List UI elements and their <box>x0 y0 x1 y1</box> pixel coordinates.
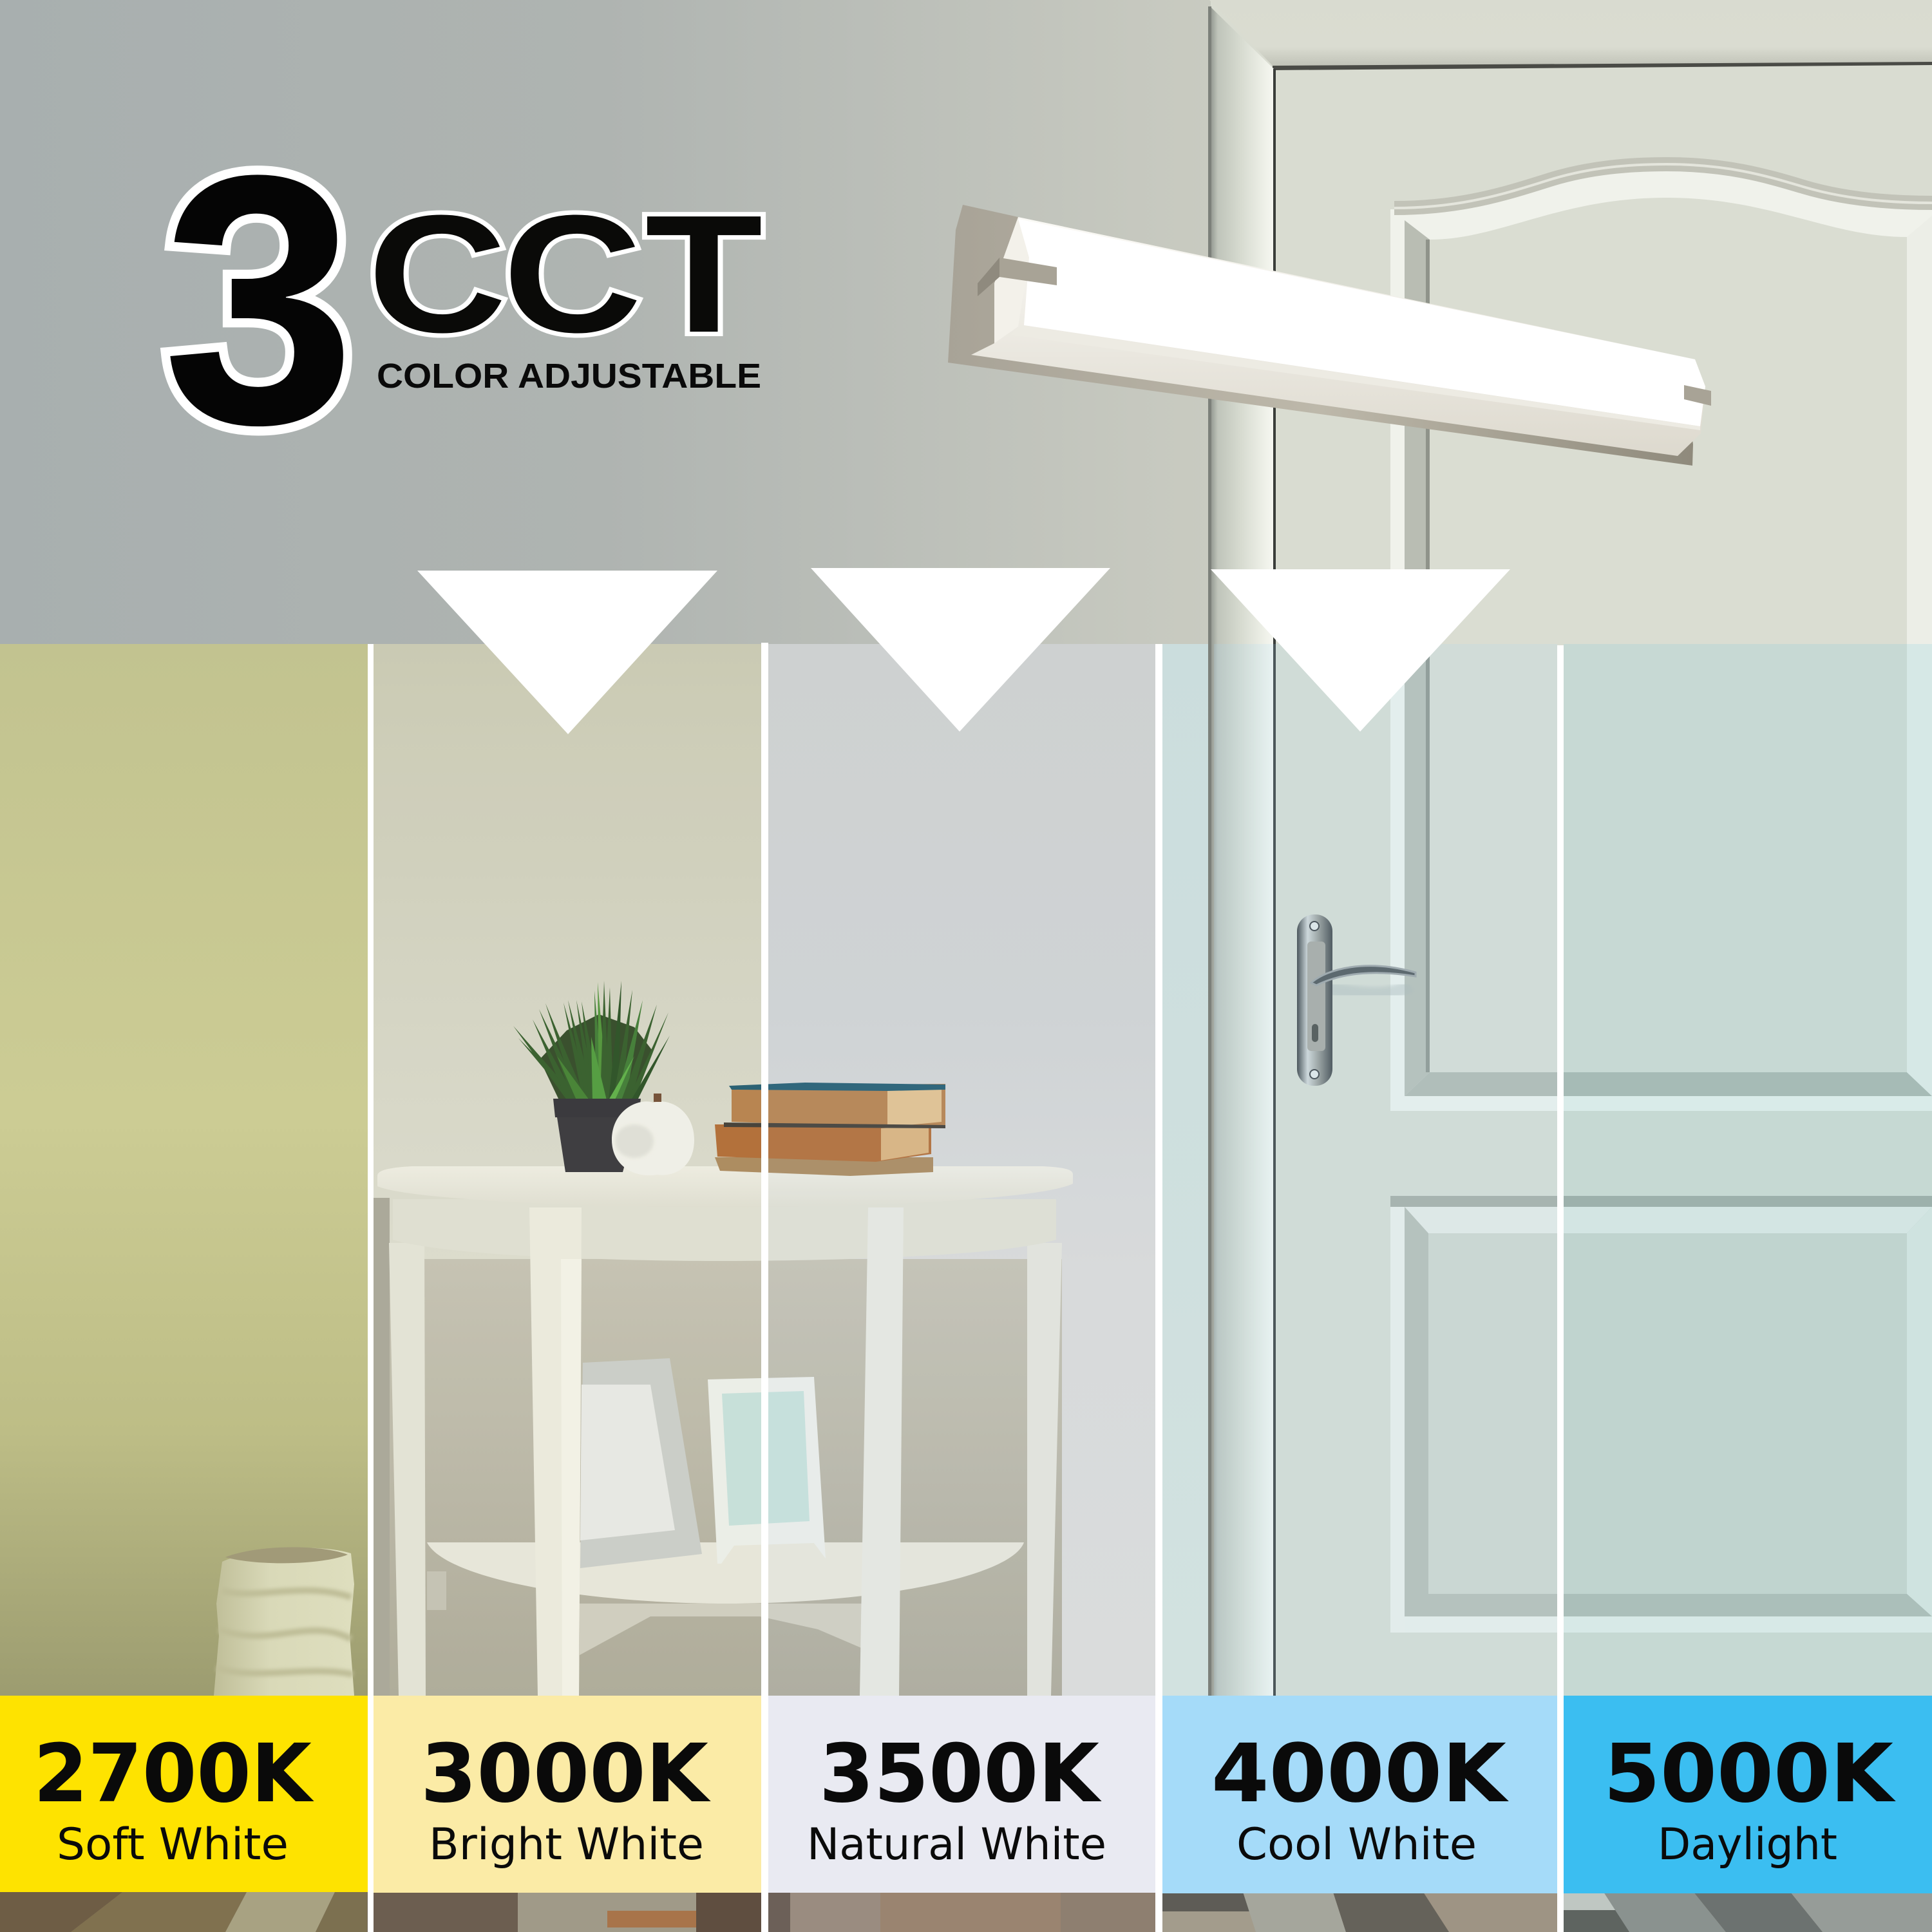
lower panel groove <box>1390 1196 1932 1207</box>
plank 5000K dark <box>1564 1910 1629 1932</box>
big numeral 3: 3 <box>162 101 355 498</box>
plant pot <box>557 1117 638 1172</box>
lower right bevel <box>1907 1207 1932 1616</box>
icon: door handle <box>1297 914 1416 1086</box>
leg: front left <box>529 1208 582 1696</box>
name: Natural White <box>807 1819 1106 1870</box>
name: Bright White <box>429 1819 704 1870</box>
panel: tinted wall columns <box>0 644 1214 1696</box>
vase folds <box>216 1591 353 1674</box>
upper panel raised face <box>1430 198 1907 1072</box>
handle plate <box>1297 914 1332 1086</box>
lower shelf <box>427 1542 1024 1604</box>
bar <box>1564 1696 1932 1893</box>
apron <box>393 1199 1056 1261</box>
CCT word: CCT <box>368 180 762 368</box>
door base <box>1211 0 1932 1696</box>
side frame <box>1210 6 1274 1696</box>
frame: silver picture frame <box>580 1358 702 1568</box>
wall tint 2700K <box>0 644 368 1696</box>
value: 4000K <box>1211 1727 1509 1821</box>
left bevel dark edge <box>1426 240 1430 1072</box>
panel: floor planks <box>0 1889 1932 1932</box>
middle book <box>715 1124 931 1162</box>
lever shadow <box>1327 985 1410 994</box>
diffuser left side <box>994 217 1029 343</box>
arch highlight line <box>1394 164 1932 208</box>
frame edge line <box>1208 6 1211 1696</box>
plank 4000K left light <box>1162 1911 1259 1932</box>
icon: potted plant <box>513 981 670 1172</box>
plank 2700K right <box>316 1892 367 1932</box>
apple stem <box>654 1094 661 1102</box>
bar <box>374 1696 761 1893</box>
tint overlay: 3500K cool <box>768 644 1155 1696</box>
right bracket <box>1684 385 1711 406</box>
shelf rim shadow <box>427 1571 446 1610</box>
stand frame glass <box>722 1391 810 1526</box>
plank 3500K mid <box>790 1892 880 1932</box>
2700K label <box>0 1696 368 1892</box>
value: 3000K <box>421 1727 711 1821</box>
wall tint 4000K <box>1162 644 1214 1696</box>
wall tint 3000K <box>374 644 761 1696</box>
5000K label <box>1564 1696 1932 1893</box>
top frame <box>1209 0 1932 67</box>
arch moulding <box>1394 164 1932 208</box>
left bevel upper <box>1405 220 1430 1096</box>
mid rail <box>1390 1111 1932 1196</box>
top screw <box>1310 922 1319 931</box>
4000K label <box>1162 1696 1557 1893</box>
back shelf strut <box>580 1604 863 1655</box>
bar <box>0 1696 368 1892</box>
stand frame outer <box>708 1377 826 1564</box>
plank 4000K warm <box>1423 1892 1557 1932</box>
plant blades <box>513 981 670 1100</box>
plank 4000K mid <box>1243 1892 1346 1932</box>
name: Cool White <box>1236 1819 1477 1870</box>
lower panel raised face <box>1428 1233 1907 1594</box>
door hinge gap line <box>1273 69 1276 1696</box>
leg: front right <box>860 1208 904 1696</box>
plank 3000K right <box>696 1892 761 1932</box>
arrow: down triangle centre <box>811 568 1110 732</box>
upper bevel right side <box>1907 1072 1932 1096</box>
vase opening <box>225 1547 348 1563</box>
apple shade <box>615 1124 654 1158</box>
door top gap line <box>1273 62 1932 70</box>
vase body <box>214 1548 354 1696</box>
plank 5000K right <box>1790 1892 1932 1932</box>
top cover teal <box>729 1083 945 1091</box>
nickel backplate <box>948 205 1693 466</box>
plank 2700K dark <box>0 1892 122 1932</box>
plank 2700K mid <box>71 1892 247 1932</box>
top wall background <box>0 0 1211 644</box>
bottom book <box>715 1157 933 1176</box>
silver frame outer <box>580 1358 702 1568</box>
bottom screw <box>1310 1070 1319 1079</box>
3500K label <box>768 1696 1155 1893</box>
plank 3000K light <box>518 1892 696 1932</box>
upper panel white band <box>1390 166 1932 1111</box>
diffuser front bright face <box>1018 219 1705 426</box>
name: Daylight <box>1658 1819 1837 1870</box>
diffuser lip line <box>1011 325 1700 430</box>
lower panel bevel <box>1405 1207 1932 1616</box>
plank 3000K orange <box>607 1911 696 1927</box>
plank 4000K dark <box>1333 1892 1449 1932</box>
tabletop <box>377 1166 1073 1208</box>
door with frame <box>1208 0 1932 1696</box>
arrow: down triangle right <box>1211 569 1510 732</box>
lower panel moulding <box>1405 1616 1932 1633</box>
lower top bevel <box>1405 1207 1932 1233</box>
icon: stacked books <box>715 1083 945 1176</box>
plank 4000K left dark <box>1162 1892 1249 1911</box>
value: 5000K <box>1604 1727 1896 1821</box>
left wall shade <box>374 1198 390 1696</box>
value: 2700K <box>33 1727 314 1821</box>
book shadow line <box>724 1122 945 1128</box>
bar <box>1162 1696 1557 1893</box>
name: Soft White <box>57 1819 289 1870</box>
diffuser body <box>971 217 1705 456</box>
silver frame inner photo <box>580 1385 675 1540</box>
left moulding lower <box>1390 1207 1405 1633</box>
bar <box>768 1696 1155 1893</box>
plank 3500K left <box>768 1892 790 1932</box>
product: vanity light fixture <box>948 205 1711 466</box>
lever <box>1311 966 1416 985</box>
top book cover <box>732 1084 945 1127</box>
3000K label <box>374 1696 761 1893</box>
wall tint 3500K <box>768 644 1155 1696</box>
floor base <box>0 1889 1932 1932</box>
leg: far right <box>1027 1243 1062 1696</box>
panel: console table scene <box>374 1166 1073 1696</box>
plank 3500K right <box>1061 1892 1155 1932</box>
plank 3000K left <box>374 1892 518 1932</box>
panel: colour temperature label bars <box>0 1696 1932 1893</box>
plank 5000K mid 2 <box>1694 1892 1823 1932</box>
plate inset <box>1307 942 1325 1051</box>
frame: white stand frame <box>708 1377 826 1564</box>
tint overlay: 4000K blue <box>1214 644 1557 1696</box>
plank 5000K mid <box>1604 1892 1726 1932</box>
icon: ceramic vase <box>214 1547 354 1696</box>
tint overlay: 5000K blue <box>1564 644 1932 1696</box>
tint overlay: 3000K warm <box>374 644 761 1696</box>
plant dark mass <box>540 1014 652 1100</box>
plank 3500K warm <box>880 1892 1061 1932</box>
icon: white ceramic apple <box>612 1094 694 1175</box>
value: 3500K <box>819 1727 1102 1821</box>
column dividers <box>368 643 1564 1932</box>
keyhole <box>1312 1024 1318 1042</box>
middle pages <box>881 1126 929 1160</box>
plank 2700K light <box>225 1892 335 1932</box>
upper bottom bevel <box>1405 1072 1932 1096</box>
subtitle: COLOR ADJUSTABLE <box>377 357 761 395</box>
arrow: down triangle left <box>417 571 717 734</box>
top book pages <box>887 1087 942 1127</box>
pot rim <box>553 1099 641 1117</box>
apple body <box>612 1101 694 1175</box>
leg: far left <box>389 1243 426 1696</box>
shadow wall under table <box>389 1259 1062 1696</box>
leg front left shade <box>561 1259 582 1696</box>
title: 3CCT logo <box>162 101 762 498</box>
left bracket <box>999 258 1057 285</box>
plank 5000K light <box>1564 1892 1615 1910</box>
left bracket stem <box>978 258 999 296</box>
